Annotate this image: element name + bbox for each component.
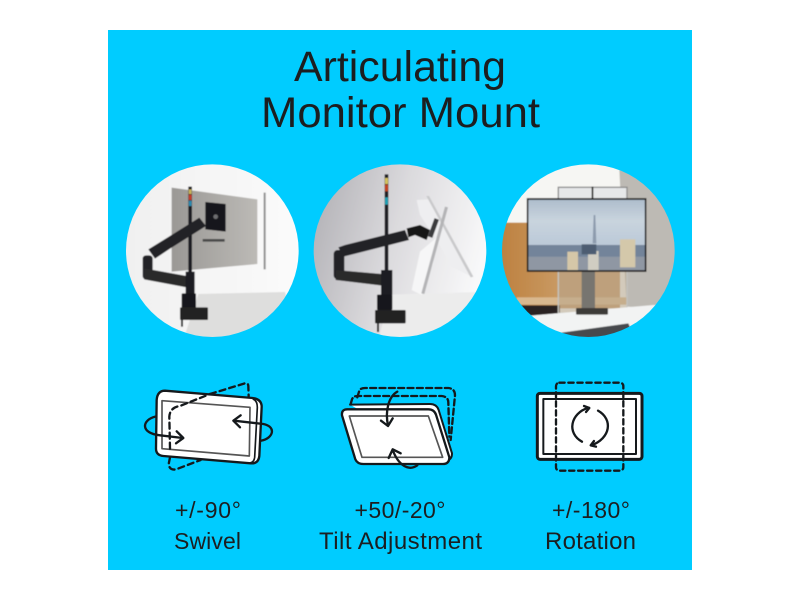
label: rotation — [545, 497, 636, 555]
background panel — [108, 30, 692, 570]
label: swivel — [174, 497, 241, 554]
label: rotation: Rotation — [545, 528, 636, 555]
label: rotation: +/-180° — [552, 497, 630, 523]
title — [261, 43, 540, 137]
photo: rotation — [502, 164, 675, 337]
icon: rotation — [537, 383, 642, 471]
icon: swivel — [145, 383, 272, 470]
label: tilt adjustment: Tilt Adjustment — [319, 528, 482, 555]
title: Articulating — [294, 43, 506, 91]
title: Monitor Mount — [261, 89, 540, 137]
label: swivel: Swivel — [174, 528, 241, 554]
label: tilt adjustment — [319, 497, 482, 555]
photo: swivel — [126, 164, 299, 337]
infographic canvas — [108, 30, 692, 570]
photo: tilt — [314, 164, 486, 337]
label: swivel: +/-90° — [175, 497, 241, 523]
label: tilt adjustment: +50/-20° — [354, 497, 446, 523]
icon: tilt — [342, 388, 455, 468]
